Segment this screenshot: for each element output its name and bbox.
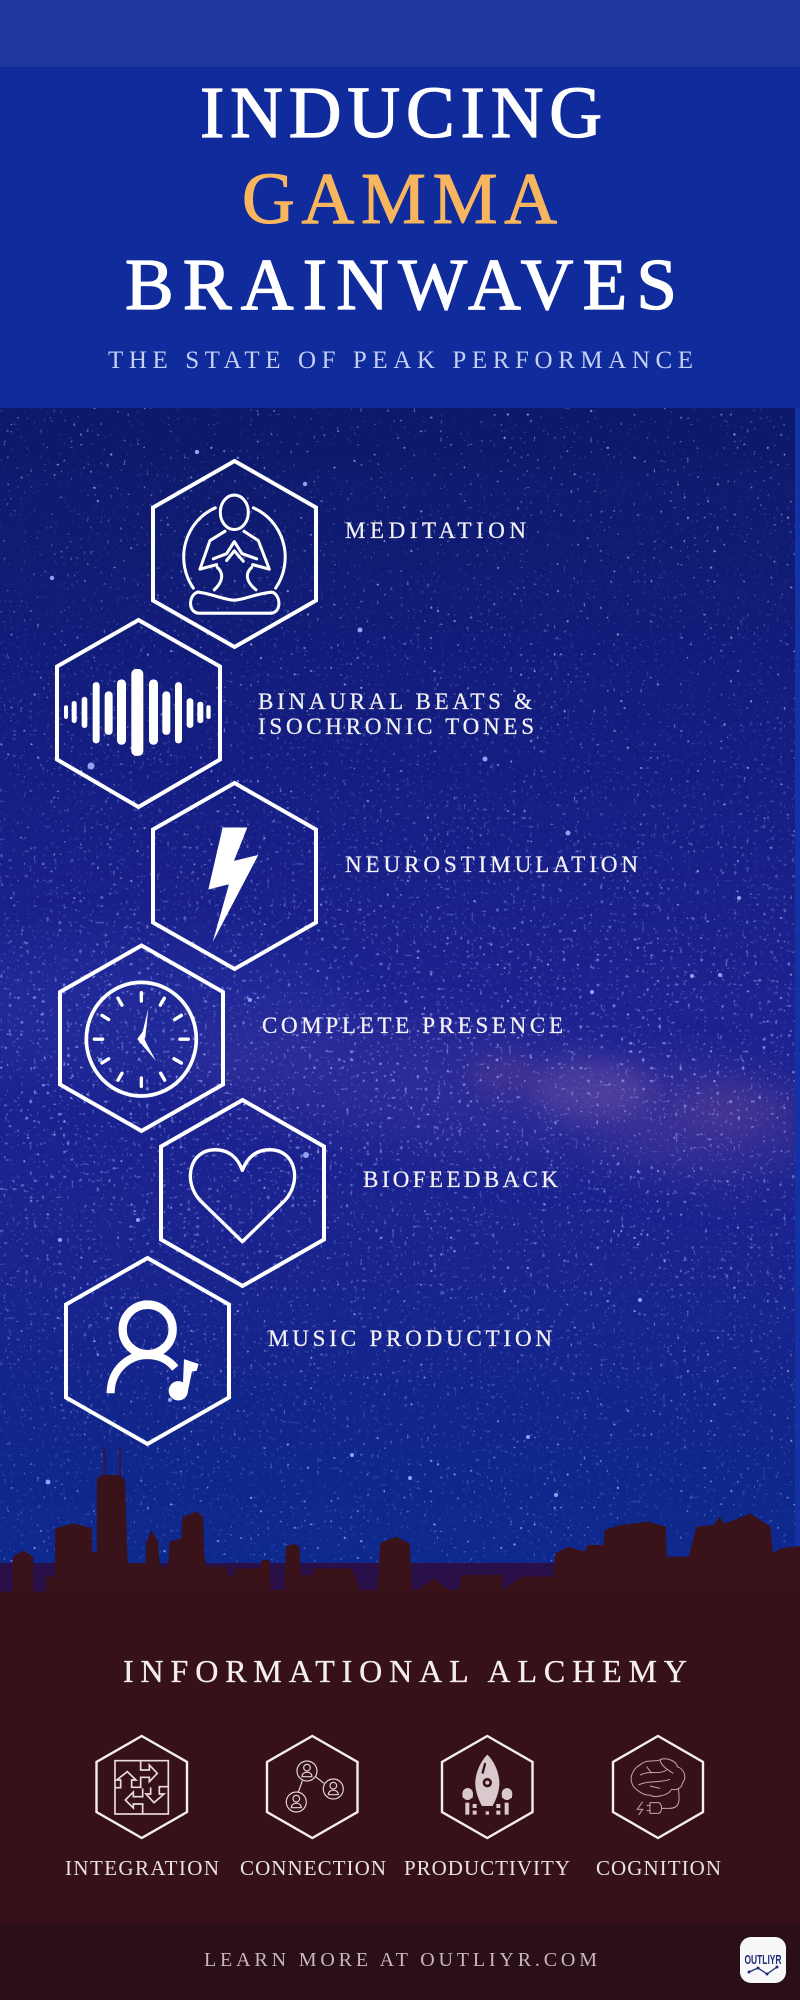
icon: rocket: [462, 1755, 512, 1815]
hexagon: [613, 1736, 703, 1838]
hexagon: [66, 1258, 229, 1444]
icon: meditating figure: [184, 495, 285, 613]
label: PRODUCTIVITY: [404, 1856, 570, 1880]
label: INTEGRATION: [65, 1856, 219, 1880]
panel: maroon lower section with city skyline: [0, 1448, 800, 1923]
item: binaural beats: [57, 620, 532, 807]
label: COGNITION: [596, 1856, 721, 1880]
panel: footer: [0, 1923, 800, 2000]
panel: starry sky background: [0, 408, 800, 1608]
icon: puzzle arrows: [115, 1761, 168, 1814]
hexagon: [153, 461, 316, 647]
logo badge: [740, 1937, 786, 1983]
icon: brain with plug: [631, 1759, 685, 1815]
icon: clock: [86, 982, 196, 1096]
icon: connected people: [286, 1761, 343, 1812]
title line: INDUCING: INDUCING: [200, 72, 602, 153]
hexagon: [161, 1100, 324, 1286]
benefit: productivity: [404, 1736, 570, 1880]
hexagon: [96, 1736, 187, 1838]
icon: sound waveform: [64, 669, 211, 756]
label: NEUROSTIMULATION: [345, 852, 638, 877]
skyline horizon band: [0, 1563, 800, 1595]
skyline: [0, 1475, 800, 1620]
logo badge: OUTLIYR: [744, 1952, 782, 1967]
item: biofeedback: [161, 1100, 558, 1286]
hexagon: [57, 620, 220, 807]
hexagon: [60, 946, 223, 1131]
benefit: cognition: [596, 1736, 721, 1880]
label: MEDITATION: [345, 518, 526, 543]
item: music production: [66, 1258, 552, 1444]
benefit: connection: [240, 1736, 386, 1880]
benefit: integration: [65, 1736, 219, 1880]
item: meditation: [153, 461, 526, 647]
label: CONNECTION: [240, 1856, 386, 1880]
footer text: LEARN MORE AT OUTLIYR.COM: [204, 1949, 597, 1971]
icon: person with music note: [111, 1305, 199, 1400]
label line 2: ISOCHRONIC TONES: [258, 714, 534, 739]
label: MUSIC PRODUCTION: [268, 1326, 552, 1351]
label: COMPLETE PRESENCE: [262, 1013, 563, 1038]
section heading: INFORMATIONAL ALCHEMY: [123, 1653, 687, 1689]
hexagon: [267, 1736, 358, 1838]
subtitle: THE STATE OF PEAK PERFORMANCE: [108, 347, 693, 374]
hexagon: [153, 783, 316, 969]
label: BIOFEEDBACK: [363, 1167, 558, 1192]
label: BINAURAL BEATS &: [258, 689, 532, 714]
title line: BRAINWAVES: BRAINWAVES: [125, 244, 677, 325]
right edge strip: [795, 408, 800, 1568]
title line: GAMMA: GAMMA: [242, 158, 557, 239]
hexagon: [442, 1736, 532, 1838]
item: neurostimulation: [153, 783, 638, 969]
item: complete presence: [60, 946, 563, 1131]
icon: heart: [190, 1150, 295, 1242]
icon: lightning bolt: [208, 827, 258, 942]
panel: header: [0, 0, 800, 408]
